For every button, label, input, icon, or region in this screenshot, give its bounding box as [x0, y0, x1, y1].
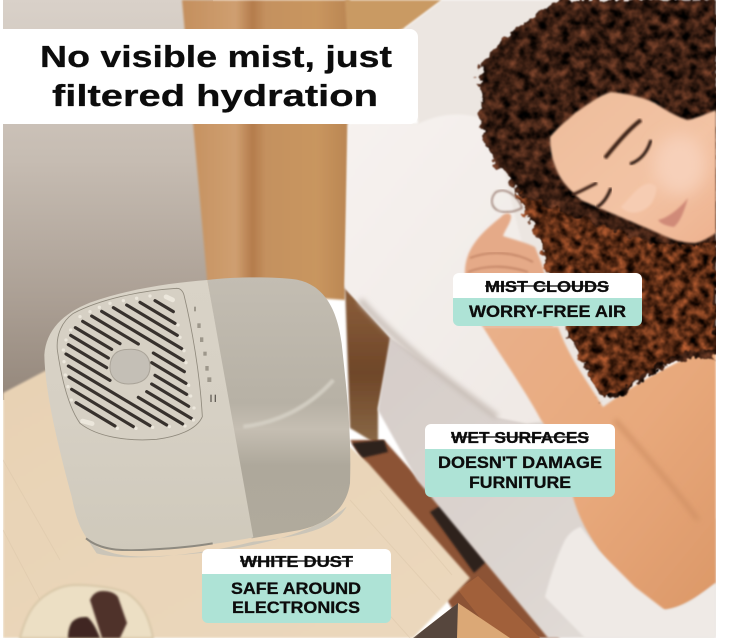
cheek glow: [654, 135, 706, 195]
humidifier: [44, 277, 350, 557]
hair base: [484, 0, 716, 394]
bottle: [90, 591, 127, 638]
base rim: [83, 507, 347, 557]
eyebrow 2: [572, 183, 597, 195]
title banner: [3, 29, 418, 124]
water tank: [207, 277, 350, 538]
bottle: [68, 617, 100, 638]
stray curl: [492, 191, 522, 212]
floor: [350, 440, 560, 638]
eyebrow 1: [605, 120, 641, 158]
callout: mist clouds: MIST CLOUDS: [485, 279, 609, 296]
beige body: [44, 280, 253, 550]
wall: [3, 0, 213, 400]
lower pillow: [345, 115, 590, 423]
callout: wet surfaces: [425, 424, 615, 497]
hand: [465, 213, 553, 327]
wooden beam top: [345, 0, 442, 50]
title line 2: filtered hydration: [52, 78, 378, 113]
arm crease: [615, 420, 698, 520]
closed eye 1: [630, 140, 651, 164]
closed eye 2: [597, 188, 611, 207]
nose: [621, 184, 656, 213]
callout: mist clouds: WORRY-FREE AIR: [469, 303, 626, 321]
bed sheet: [378, 337, 716, 638]
arm and shoulder: [483, 327, 716, 610]
hair texture: [480, 0, 716, 400]
tank reflection: [243, 380, 333, 427]
grille panel: [57, 288, 202, 440]
callout: white dust: ELECTRONICS: [232, 599, 360, 617]
center button: [110, 349, 150, 384]
lower hair: [512, 190, 716, 398]
bottom pillow corner: [545, 527, 716, 638]
tray: [20, 585, 153, 638]
title line 1: No visible mist, just: [40, 39, 392, 74]
base seam: [86, 538, 213, 550]
pillow fold: [360, 300, 497, 417]
oil tray with bottles: [20, 585, 153, 638]
callout: white dust: SAFE AROUND: [231, 580, 361, 598]
callout: white dust: [202, 549, 391, 623]
lips: [658, 198, 688, 227]
table top: [3, 363, 470, 638]
callout: wet surfaces: WET SURFACES: [451, 430, 589, 447]
dark wood lower post: [345, 285, 392, 445]
callout: wet surfaces: DOESN'T DAMAGE: [438, 454, 602, 472]
grille slots: [66, 301, 192, 427]
control icons: [194, 307, 216, 402]
callout: wet surfaces: FURNITURE: [469, 474, 571, 492]
grille dots: [62, 294, 196, 430]
callout: white dust: WHITE DUST: [240, 554, 354, 571]
wooden headboard post: [182, 0, 350, 300]
upper pillow: [345, 0, 716, 423]
table leg: [413, 603, 458, 638]
face: [550, 92, 716, 243]
woman: [465, 0, 716, 638]
callout: mist clouds: [453, 273, 642, 326]
